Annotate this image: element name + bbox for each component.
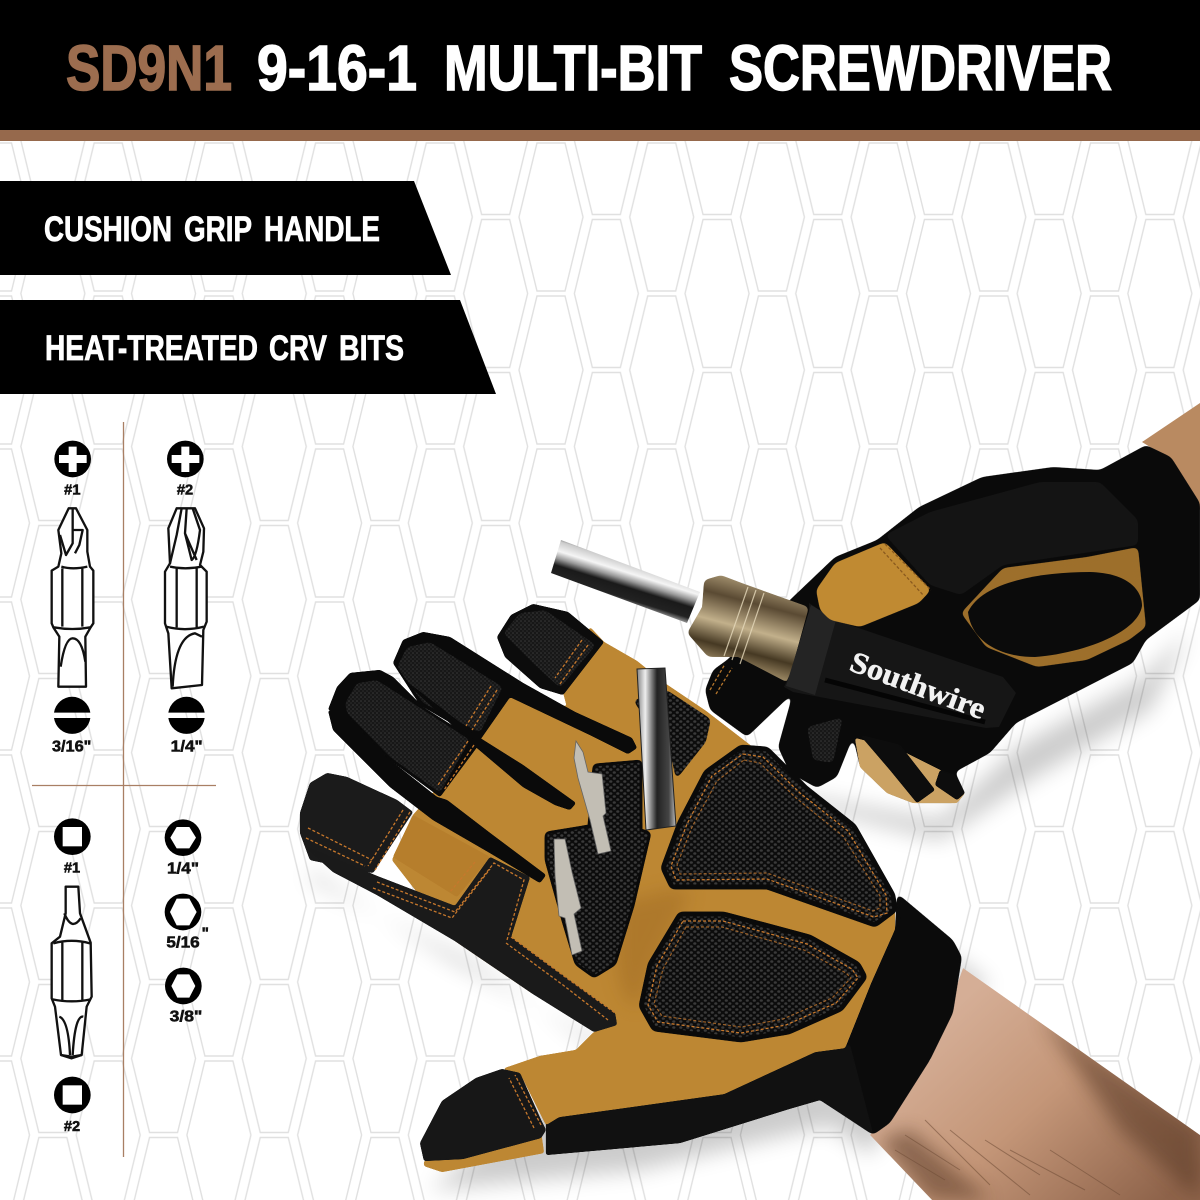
bit drawing: phillips 1 and slotted 3/16 [52, 508, 93, 687]
upper hand in black glove [705, 445, 1200, 803]
icon: slotted 3/16 [52, 697, 91, 756]
finger C outline [328, 670, 480, 797]
screwdriver [551, 540, 1016, 728]
lower fingers yellow [855, 738, 965, 803]
bit chart: square and hex sizes [52, 818, 209, 1135]
open glove, palm up [300, 604, 962, 1172]
icon: hex 1/4 [165, 819, 201, 877]
thumb side black band [546, 1045, 873, 1155]
wrist: upper forearm [1142, 403, 1200, 510]
title: product name [257, 32, 1112, 104]
glove drop shadows [310, 630, 1190, 1190]
bit drawing: phillips 2 and slotted 1/4 [165, 508, 207, 688]
hex bar bit [637, 668, 676, 830]
feature tag: heat-treated CRV bits: CRV [269, 328, 327, 368]
glove dark palm pad [968, 572, 1142, 657]
stitching on fingers and mesh [306, 640, 615, 1128]
feature tag: cushion grip handle [0, 181, 451, 275]
icon: slotted 3/16: 3/16" [52, 739, 91, 756]
icon: hex 5/16: " [202, 925, 209, 942]
icon: hex 5/16: 5/16 [166, 935, 200, 952]
fingertip stitching [880, 544, 931, 596]
feature tag: cushion grip handle: GRIP [184, 209, 252, 249]
finger D leather tip [300, 773, 413, 873]
icon: hex 3/8 [165, 968, 202, 1025]
icon: phillips #1: #1 [64, 482, 80, 498]
double-ended phillips and slotted bit [574, 741, 611, 854]
forearm below open glove [870, 968, 1200, 1200]
finger A pebbled pad [503, 610, 596, 688]
icon: square #2: #2 [64, 1119, 80, 1135]
icon: square #1 [54, 818, 91, 877]
icon: phillips #2 [167, 441, 204, 498]
handle grip groove [825, 680, 985, 722]
forearm hair [895, 1120, 1120, 1195]
icon: hex 3/8: 3/8" [170, 1008, 202, 1025]
upper finger-base mesh pad [633, 690, 711, 780]
bit drawing: square 1 and square 2 [52, 887, 92, 1058]
wrist cuff [820, 893, 962, 1135]
finger D yellow section [393, 815, 490, 897]
icon: hex 5/16 [165, 894, 209, 952]
forearm edge shading [880, 1015, 1200, 1200]
feature tag: cushion grip handle: CUSHION [44, 209, 172, 249]
title: model number: SD9N1 [66, 32, 232, 104]
lower finger black strip [860, 735, 965, 803]
collar ribs [724, 587, 764, 664]
chrome shaft [551, 540, 700, 623]
double-ended square bit [554, 839, 582, 955]
amber ratchet collar [687, 575, 809, 683]
icon: slotted 1/4 [168, 697, 205, 756]
black handle [784, 603, 1016, 728]
icon: slotted 1/4: 1/4" [171, 739, 203, 756]
header banner [0, 0, 1200, 141]
icon: hex 1/4: 1/4" [167, 860, 199, 877]
slit between fingers C and D [328, 710, 546, 883]
back finger stitching [710, 664, 732, 694]
large upper palm pad [663, 747, 895, 925]
finger B pebbled pad [397, 642, 503, 733]
feature tag: heat-treated CRV bits: BITS [339, 328, 404, 368]
bit chart: phillips and slotted [52, 441, 207, 756]
feature tag: heat-treated CRV bits [0, 300, 496, 394]
title: product name: 9-16-1 [257, 32, 417, 104]
thumb yellow under-tip [424, 1132, 544, 1172]
icon: phillips #2: #2 [177, 482, 193, 498]
feature tag: heat-treated CRV bits: HEAT-TREATED [45, 328, 258, 368]
title: product name: SCREWDRIVER [729, 32, 1112, 104]
glove back mesh [885, 482, 1138, 595]
icon: square #1: #1 [64, 861, 80, 877]
feature tag: cushion grip handle: HANDLE [264, 209, 380, 249]
centre mesh pad [546, 761, 650, 977]
large lower palm pad [641, 914, 865, 1040]
icon: phillips #1 [54, 441, 91, 498]
pinky side mesh strip [303, 845, 617, 1032]
handle collar ring [786, 605, 836, 695]
title: product name: MULTI-BIT [444, 32, 702, 104]
finger A outline [497, 604, 604, 695]
brand name: Southwire [846, 645, 990, 726]
thumb black leather tip [420, 1069, 546, 1161]
palm shading [616, 889, 690, 1005]
bit chart dividers [32, 422, 216, 1157]
icon: square #2 [54, 1077, 91, 1135]
yellow palm [392, 627, 895, 1125]
gripping fingertip yellow [816, 542, 931, 627]
finger B outline and slit [393, 632, 637, 754]
glove yellow palm patch [961, 547, 1146, 667]
finger C pebbled pad [345, 680, 470, 793]
slit between fingers B and C [392, 670, 576, 810]
middle finger pebble pad [807, 717, 843, 763]
